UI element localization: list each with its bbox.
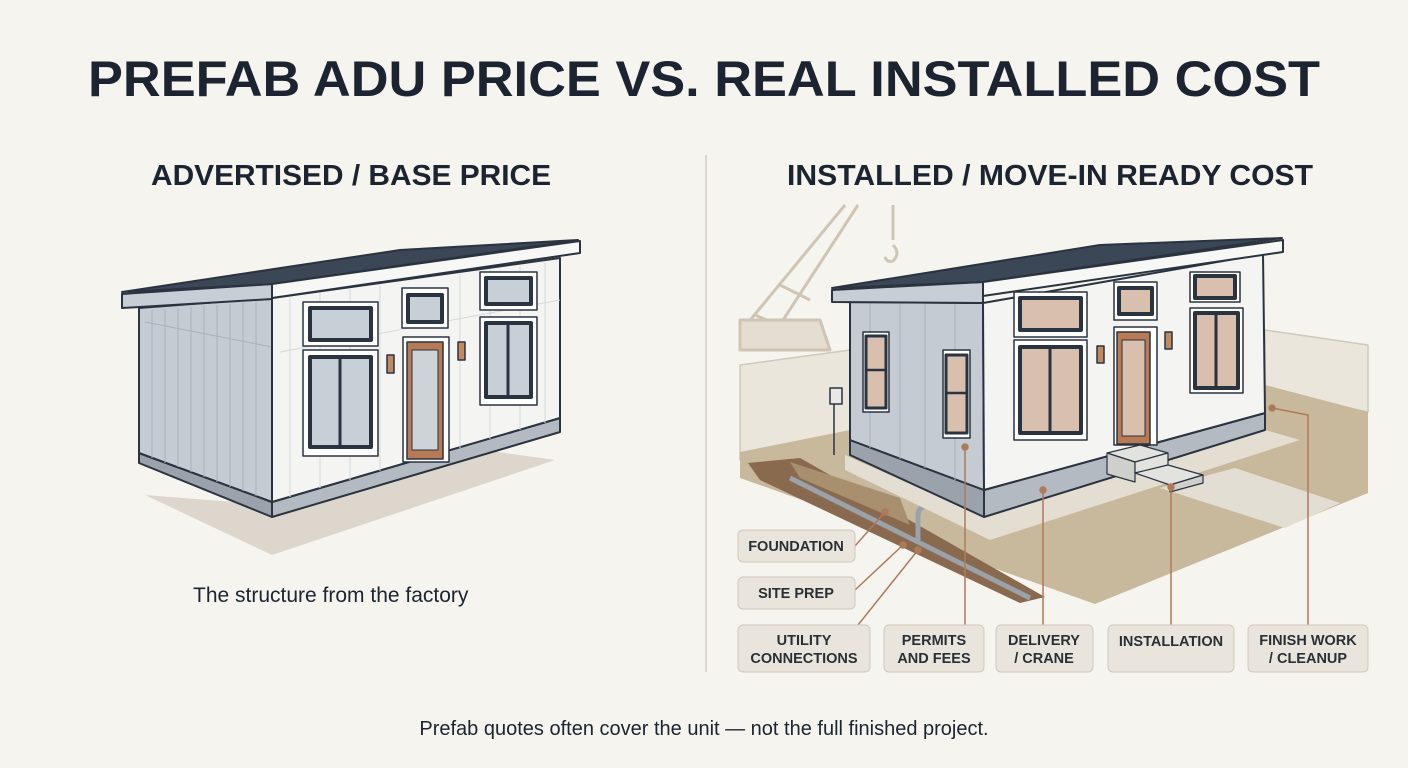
label: delivery bbox=[996, 625, 1093, 672]
label: finish: / CLEANUP bbox=[1269, 651, 1347, 667]
label: installation bbox=[1108, 625, 1234, 672]
label: finish: FINISH WORK bbox=[1259, 633, 1357, 649]
ground bbox=[740, 385, 1368, 604]
label: finish bbox=[1248, 625, 1368, 672]
label: permits: AND FEES bbox=[897, 651, 971, 667]
label: delivery: DELIVERY bbox=[1008, 633, 1080, 649]
heading: installed: INSTALLED / MOVE-IN READY COST bbox=[787, 160, 1313, 192]
label: installation: INSTALLATION bbox=[1119, 634, 1223, 650]
label: site prep: SITE PREP bbox=[758, 586, 834, 602]
walkway bbox=[1160, 468, 1340, 528]
gravel pad bbox=[845, 430, 1300, 540]
label: foundation: FOUNDATION bbox=[748, 539, 844, 555]
label: site prep bbox=[738, 577, 855, 609]
title: PREFAB ADU PRICE VS. REAL INSTALLED COST bbox=[88, 51, 1320, 107]
label: foundation bbox=[738, 530, 855, 562]
bottom caption: Prefab quotes often cover the unit — not the full finished project. bbox=[419, 718, 989, 740]
label: permits: PERMITS bbox=[902, 633, 967, 649]
caption: factory: The structure from the factory bbox=[193, 584, 469, 607]
leader lines bbox=[855, 405, 1308, 625]
steps bbox=[1107, 445, 1203, 492]
label: delivery: / CRANE bbox=[1014, 651, 1074, 667]
shadow bbox=[145, 448, 555, 555]
label: utility: CONNECTIONS bbox=[750, 651, 858, 667]
label: utility: UTILITY bbox=[777, 633, 832, 649]
trench bbox=[748, 458, 1045, 603]
left house illustration bbox=[122, 240, 580, 555]
labels bbox=[738, 530, 1368, 672]
label: utility bbox=[738, 625, 870, 672]
heading: advertised: ADVERTISED / BASE PRICE bbox=[151, 160, 551, 192]
label: permits bbox=[884, 625, 984, 672]
right scene illustration bbox=[740, 205, 1368, 604]
